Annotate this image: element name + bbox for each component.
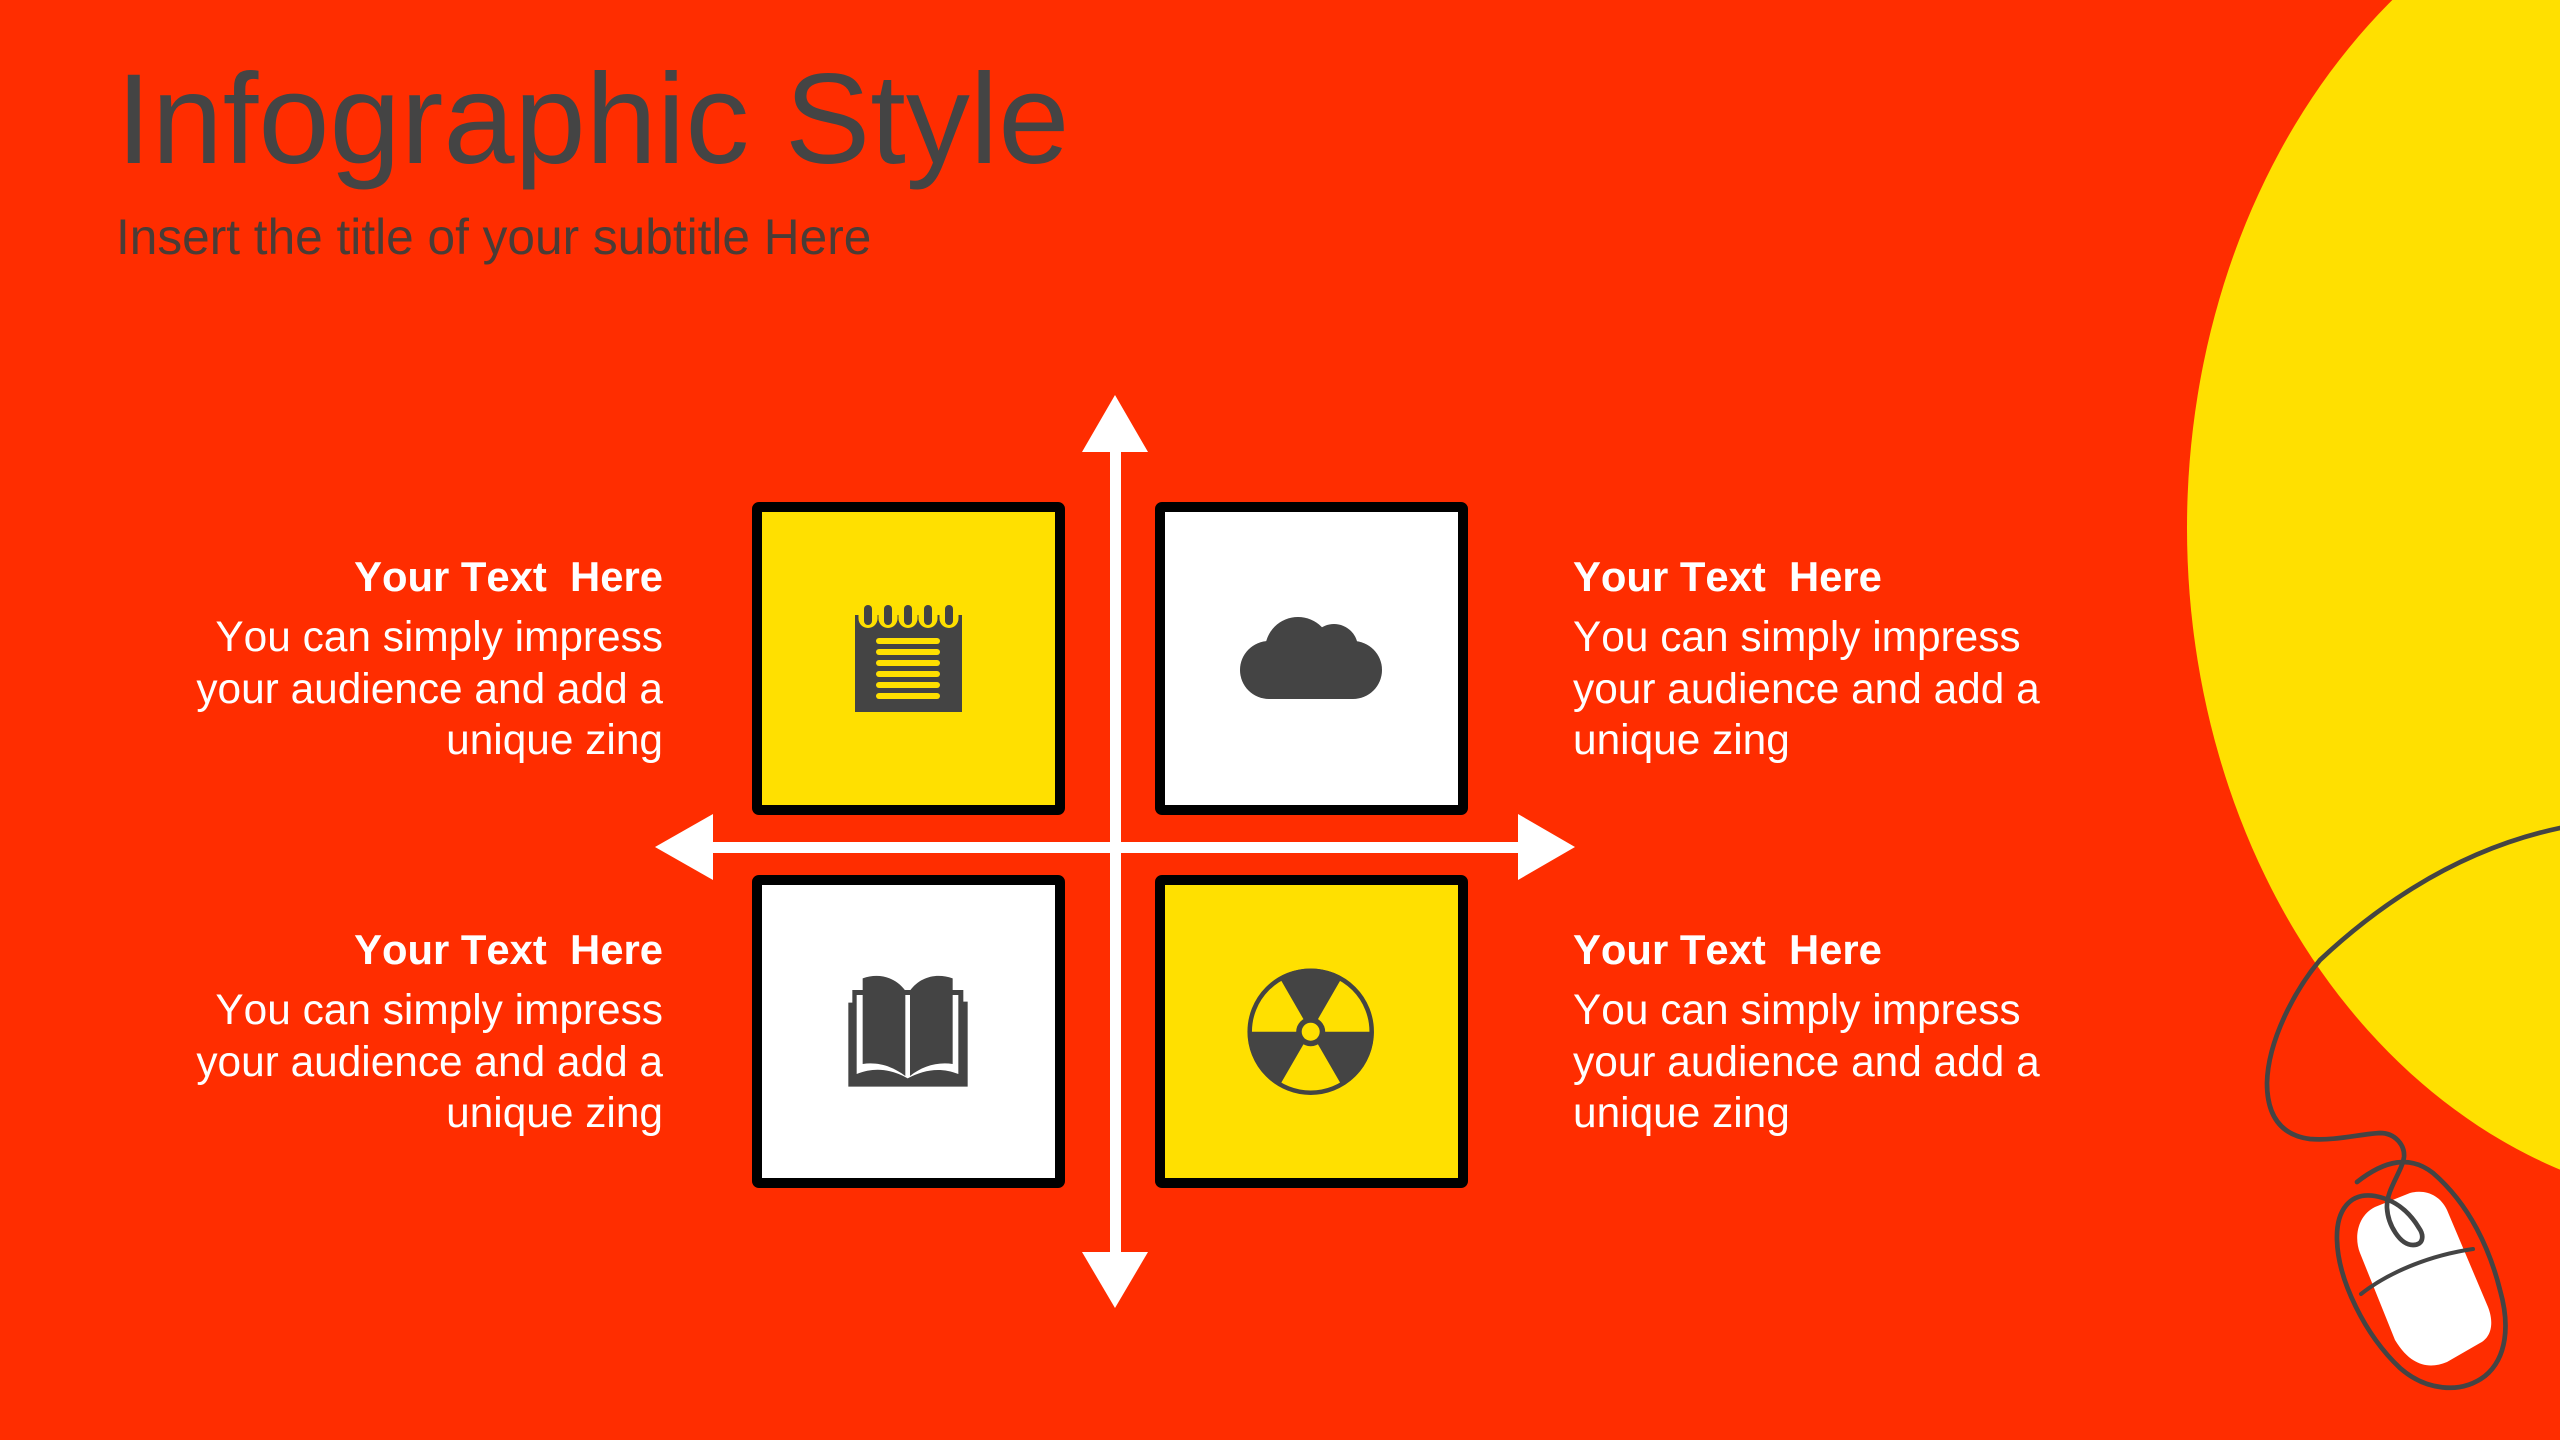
text block: top right: You can simply impress (1573, 613, 2021, 660)
text block: top right: Your Text Here (1573, 553, 1882, 600)
text block: bottom right: Your Text Here (1573, 926, 1882, 973)
text block: bottom right: your audience and add a (1573, 1038, 2040, 1085)
panel: radiation square (1160, 880, 1463, 1183)
panel: cloud square (1160, 507, 1463, 810)
panel: book square (757, 880, 1060, 1183)
text block: bottom left (196, 926, 663, 1136)
text block: top right: unique zing (1573, 716, 1790, 763)
icon: computer mouse with cable (2267, 828, 2560, 1388)
icon: radiation symbol (1248, 969, 1374, 1093)
text block: bottom left: You can simply impress (215, 986, 663, 1033)
text block: bottom left: unique zing (446, 1089, 663, 1136)
icon: cloud (1240, 617, 1382, 699)
subtitle: Insert the title of your subtitle Here (116, 209, 871, 265)
text block: top left: your audience and add a (196, 665, 663, 712)
quadrant arrows (655, 395, 1575, 1308)
text block: top left (196, 553, 663, 763)
icon: open book (848, 976, 968, 1087)
text block: bottom left: Your Text Here (354, 926, 663, 973)
icon: notepad (855, 598, 962, 712)
text block: bottom left: your audience and add a (196, 1038, 663, 1085)
text block: bottom right: You can simply impress (1573, 986, 2021, 1033)
yellow ellipse background shape (2187, 0, 2560, 1206)
text block: bottom right (1573, 926, 2040, 1136)
text block: bottom right: unique zing (1573, 1089, 1790, 1136)
text block: top left: unique zing (446, 716, 663, 763)
panel: notepad square (757, 507, 1060, 810)
text block: top left: Your Text Here (354, 553, 663, 600)
text block: top right (1573, 553, 2040, 763)
text block: top right: your audience and add a (1573, 665, 2040, 712)
title: Infographic Style (116, 48, 1069, 191)
text block: top left: You can simply impress (215, 613, 663, 660)
